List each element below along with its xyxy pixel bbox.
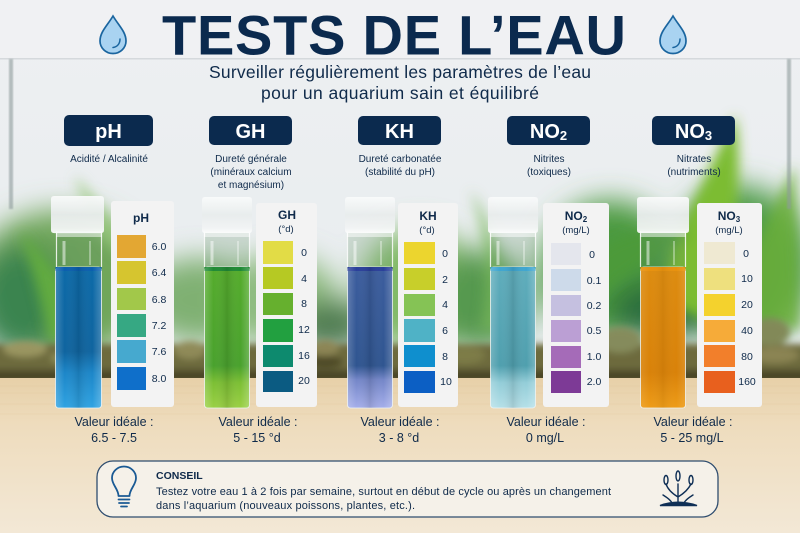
NO3 vial — [637, 197, 689, 408]
NO2 colour chart: NO — [565, 209, 583, 223]
subtitle — [209, 62, 591, 103]
pH colour chart — [111, 201, 174, 407]
NO2 badge: NO — [530, 121, 560, 143]
GH vial — [202, 197, 252, 408]
NO2 colour chart: 1.0 — [587, 351, 601, 363]
KH description: Dureté carbonatée — [359, 154, 442, 165]
conseil text: Testez votre eau 1 à 2 fois par semaine, surtout en début de cycle ou après un changement — [156, 486, 611, 498]
panel: GH — [202, 116, 317, 445]
NO3 colour chart — [697, 203, 762, 407]
NO2 ideal value: Valeur idéale : — [506, 415, 586, 429]
NO2 vial — [488, 197, 538, 408]
GH badge — [209, 116, 292, 145]
NO2 colour chart: 2.0 — [587, 376, 601, 388]
conseil text — [156, 486, 611, 512]
NO3 badge: 3 — [705, 128, 712, 143]
KH colour chart: 8 — [442, 351, 448, 363]
NO2 description: Nitrites — [533, 154, 565, 165]
pH badge — [64, 115, 153, 146]
pH ideal value: 6.5 - 7.5 — [91, 431, 137, 445]
pH description: Acidité / Alcalinité — [70, 154, 148, 165]
KH colour chart: 0 — [442, 248, 448, 260]
NO2 colour chart: 0 — [589, 249, 595, 261]
NO3 colour chart: 40 — [741, 325, 753, 337]
panel: NO2 — [488, 116, 609, 445]
pH vial — [51, 196, 104, 408]
KH colour chart: 10 — [440, 376, 452, 388]
gravel — [0, 318, 800, 384]
NO3 colour chart: 10 — [741, 273, 753, 285]
NO3 ideal value: Valeur idéale : — [654, 415, 732, 429]
GH description: Dureté générale — [215, 154, 287, 165]
panel: NO3 — [637, 116, 762, 445]
GH colour chart — [256, 203, 317, 407]
KH ideal value: Valeur idéale : — [360, 415, 440, 429]
NO3 colour chart: NO — [718, 209, 736, 223]
NO3 colour chart: 160 — [738, 376, 756, 388]
NO2 description — [527, 154, 571, 178]
pH badge: pH — [95, 121, 122, 143]
KH colour chart: 4 — [442, 299, 448, 311]
callout: conseil — [97, 461, 718, 517]
KH description — [359, 154, 442, 178]
pH colour chart: 6.4 — [152, 267, 166, 279]
subtitle: pour un aquarium sain et équilibré — [261, 83, 539, 103]
NO3 description: (nutriments) — [667, 167, 721, 178]
KH description: (stabilité du pH) — [365, 167, 435, 178]
NO3 ideal value: 5 - 25 mg/L — [660, 431, 724, 445]
subtitle: Surveiller régulièrement les paramètres de l’eau — [209, 62, 591, 82]
NO3 ideal value — [654, 415, 732, 445]
pH colour chart: 6.8 — [152, 294, 166, 306]
icon: light bulb — [112, 467, 136, 506]
KH colour chart — [398, 203, 458, 407]
NO3 badge — [652, 116, 735, 145]
NO2 colour chart: (mg/L) — [562, 225, 590, 236]
NO3 badge: NO — [675, 121, 705, 143]
GH description — [210, 154, 292, 191]
pH colour chart: pH — [133, 211, 149, 225]
KH ideal value: 3 - 8 °d — [379, 431, 419, 445]
conseil text: dans l’aquarium (nouveaux poissons, plantes, etc.). — [156, 500, 415, 512]
NO2 colour chart: 0.1 — [587, 275, 601, 287]
conseil heading: CONSEIL — [156, 470, 203, 482]
KH badge: KH — [385, 121, 414, 143]
NO3 colour chart: 0 — [743, 248, 749, 260]
NO3 colour chart: 80 — [741, 351, 753, 363]
pH colour chart: 6.0 — [152, 241, 166, 253]
icon: water drop right — [660, 16, 686, 53]
pH colour chart: 8.0 — [152, 373, 166, 385]
GH colour chart: 16 — [298, 350, 310, 362]
KH colour chart: 6 — [442, 325, 448, 337]
KH colour chart: KH — [419, 209, 437, 223]
NO3 description: Nitrates — [677, 154, 711, 165]
pH colour chart: 7.2 — [152, 320, 166, 332]
NO2 colour chart: 2 — [583, 215, 588, 224]
pH colour chart: 7.6 — [152, 346, 166, 358]
KH badge — [358, 116, 441, 145]
NO2 badge: 2 — [560, 128, 567, 143]
NO2 ideal value — [506, 415, 586, 445]
NO3 colour chart: 20 — [741, 299, 753, 311]
NO3 colour chart: 3 — [736, 215, 741, 224]
GH colour chart: 8 — [301, 298, 307, 310]
KH colour chart: 2 — [442, 274, 448, 286]
GH colour chart: 0 — [301, 247, 307, 259]
NO3 colour chart: (mg/L) — [715, 225, 743, 236]
icon: aquatic plant — [660, 471, 697, 506]
NO2 colour chart: 0.2 — [587, 300, 601, 312]
GH colour chart: 20 — [298, 375, 310, 387]
NO2 colour chart: 0.5 — [587, 325, 601, 337]
NO2 badge — [507, 116, 590, 145]
GH description: (minéraux calcium — [210, 167, 292, 178]
KH vial — [345, 197, 395, 408]
GH colour chart: 4 — [301, 273, 307, 285]
GH badge: GH — [236, 121, 266, 143]
NO2 description: (toxiques) — [527, 167, 571, 178]
NO3 description — [667, 154, 721, 178]
panel: pH — [51, 115, 174, 445]
NO2 ideal value: 0 mg/L — [526, 431, 564, 445]
GH ideal value: Valeur idéale : — [218, 415, 298, 429]
GH colour chart: 12 — [298, 324, 310, 336]
GH description: et magnésium) — [218, 180, 284, 191]
NO2 colour chart — [543, 203, 609, 407]
GH colour chart: GH — [278, 208, 296, 222]
pH ideal value: Valeur idéale : — [74, 415, 154, 429]
GH ideal value: 5 - 15 °d — [233, 431, 281, 445]
KH colour chart: (°d) — [419, 225, 435, 236]
KH ideal value — [360, 415, 440, 445]
pH ideal value — [74, 415, 154, 445]
GH ideal value — [218, 415, 298, 445]
GH colour chart: (°d) — [278, 224, 294, 235]
panel: KH — [345, 116, 458, 445]
title: TESTS DE L’EAU — [162, 4, 626, 66]
icon: water drop left — [100, 16, 126, 53]
